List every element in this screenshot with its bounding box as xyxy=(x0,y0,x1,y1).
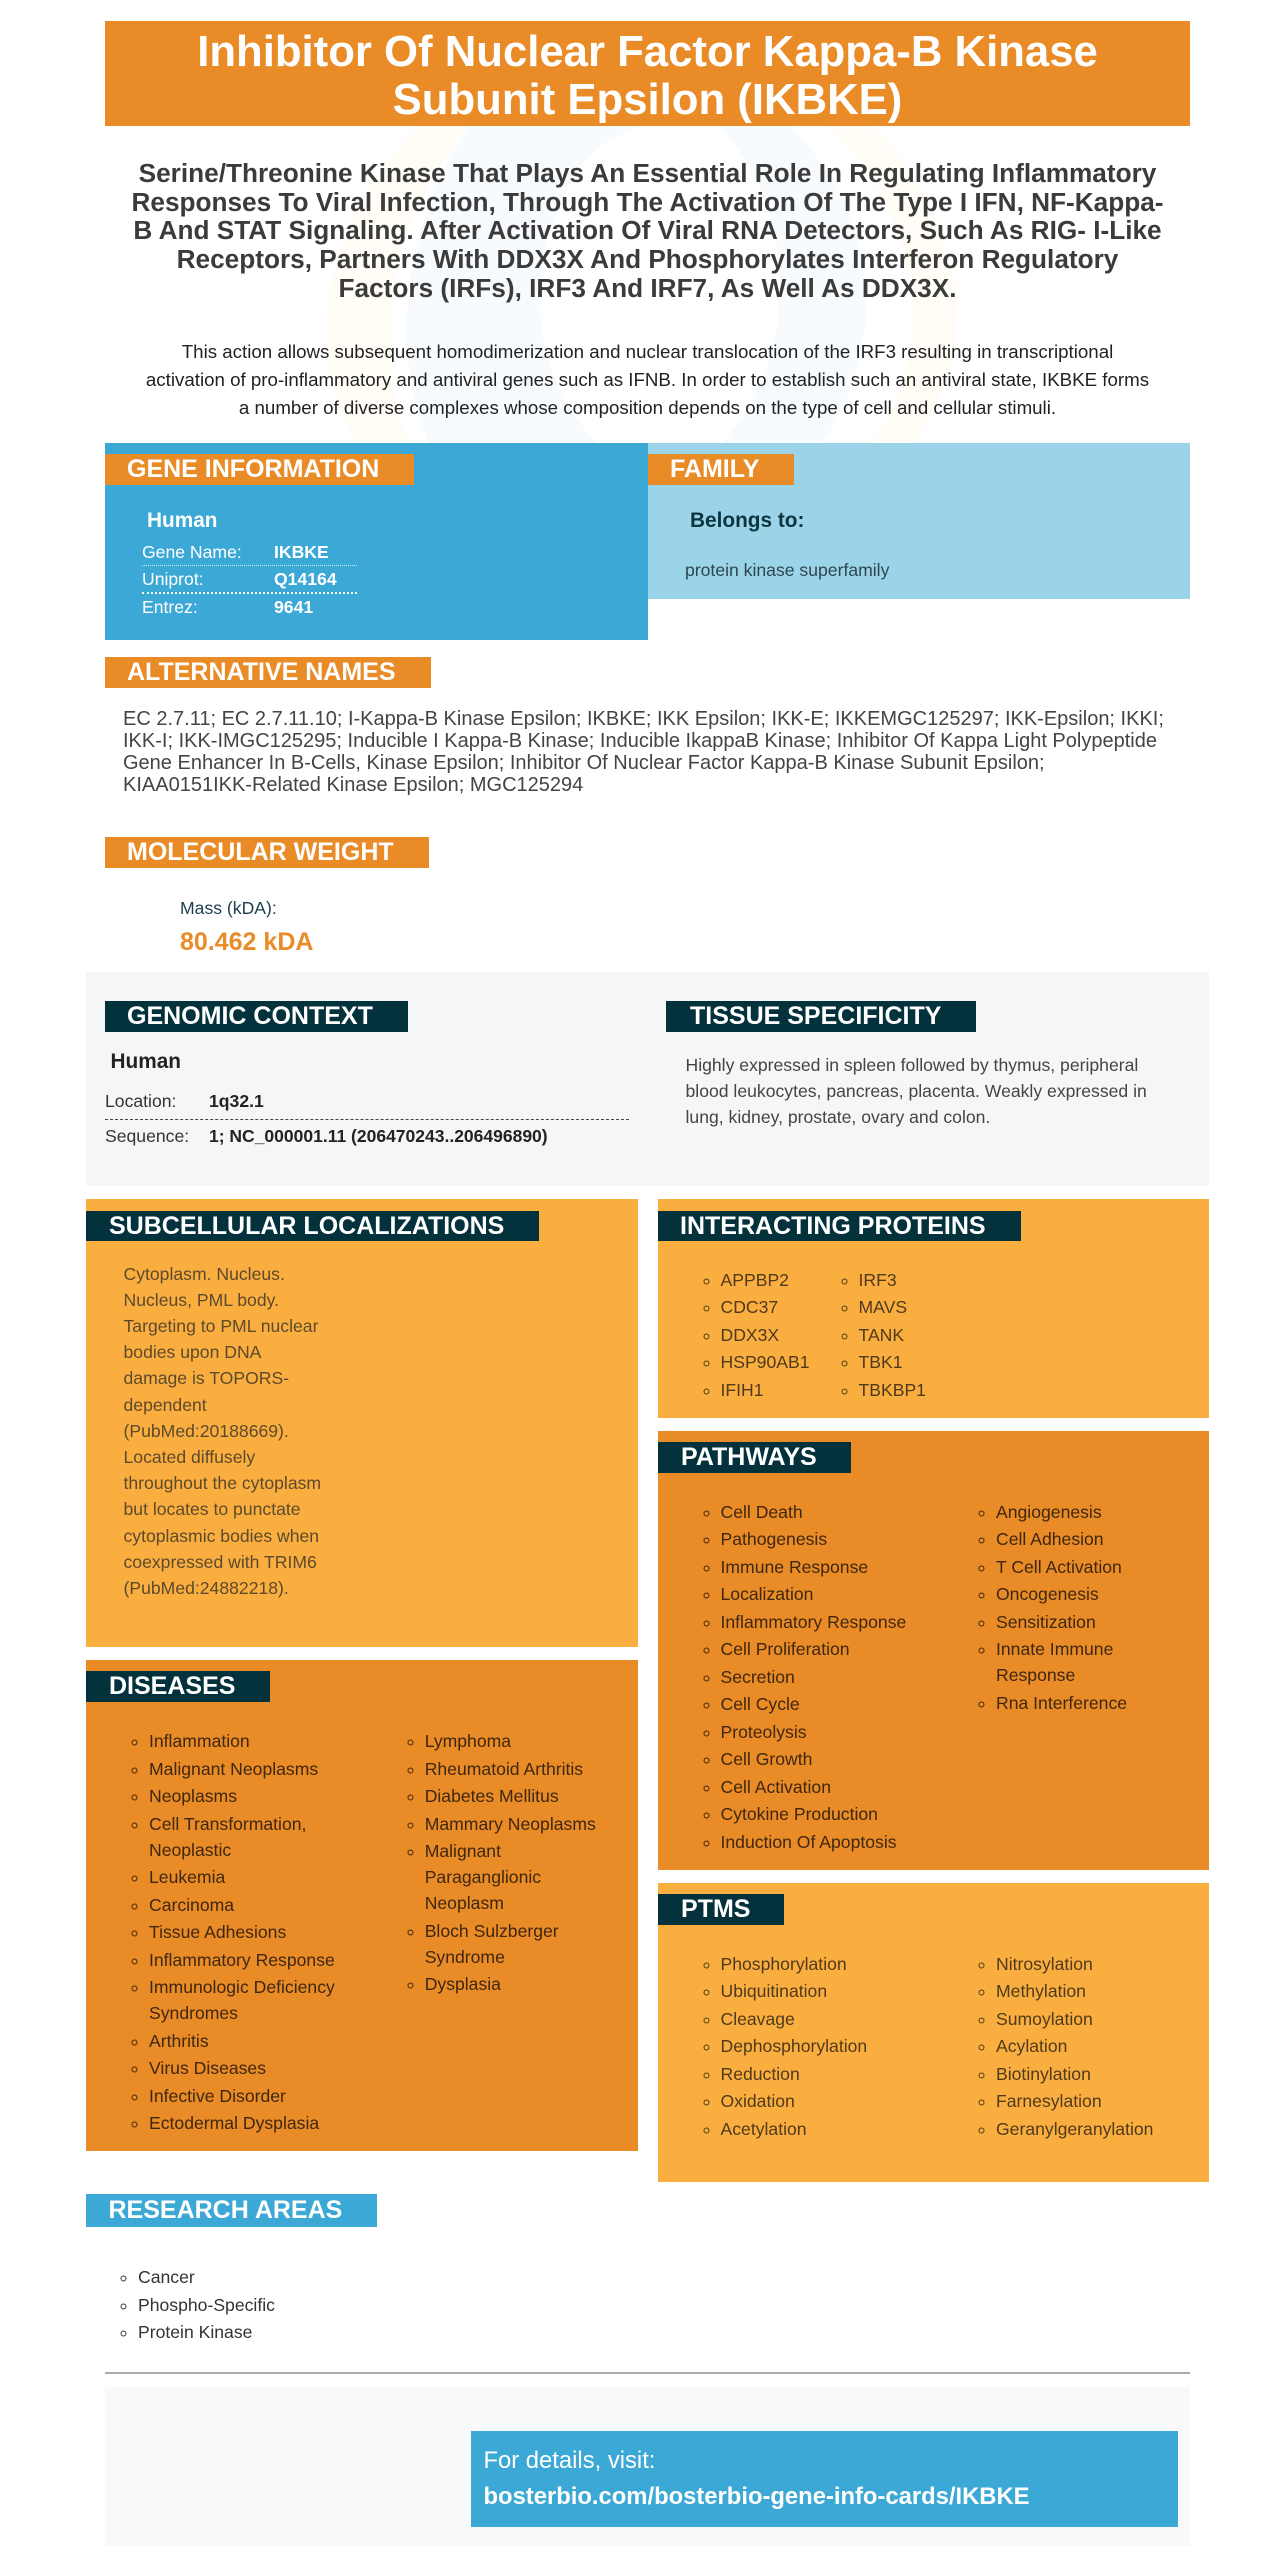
pathway list column 1: Inflammatory Response xyxy=(720,1612,906,1632)
research areas list: Phospho-Specific xyxy=(138,2294,275,2314)
alternative names text xyxy=(123,708,1164,796)
research areas list xyxy=(120,2267,275,2342)
heading: ptms xyxy=(658,1894,784,1925)
pathway list column 1: Cell Death xyxy=(720,1502,803,1522)
panel: gene information xyxy=(105,443,648,640)
pathway list column 1: Secretion xyxy=(720,1666,795,1686)
ptm list column 1 xyxy=(704,1954,867,2138)
disease list column 2: Lymphoma xyxy=(425,1731,511,1751)
disease list column 2: Malignant xyxy=(425,1841,501,1861)
pathway list column 2: Innate Immune xyxy=(996,1639,1113,1659)
disease list column 1: Infective Disorder xyxy=(149,2086,286,2106)
intro paragraph xyxy=(146,341,1149,418)
ptm list column 1: Ubiquitination xyxy=(720,1981,827,2001)
pathway list column 1: Proteolysis xyxy=(720,1722,807,1742)
subtitle xyxy=(131,158,1164,303)
alternative names text: Gene Enhancer In B-Cells, Kinase Epsilon; Inhibitor Of Nuclear Factor Kappa-B Kinase Subunit Epsilon; xyxy=(123,752,1045,774)
heading: pathways: PATHWAYS xyxy=(681,1443,817,1471)
pathway list column 1: Immune Response xyxy=(720,1556,868,1576)
ptm list column 2 xyxy=(978,1954,1153,2138)
disease list column 2: Rheumatoid Arthritis xyxy=(425,1758,583,1778)
protein list column 1: IFIH1 xyxy=(720,1380,764,1400)
heading: family xyxy=(648,454,794,485)
panel: pathways xyxy=(658,1431,1209,1870)
ptm list column 1: Cleavage xyxy=(720,2008,795,2028)
intro paragraph: activation of pro-inflammatory and antiviral genes such as IFNB. In order to establish such an antiviral state, IKBKE forms xyxy=(146,369,1149,390)
pathway list column 2: Response xyxy=(996,1665,1075,1685)
panel: family xyxy=(648,443,1190,599)
subtitle: Responses To Viral Infection, Through The Activation Of The Type I IFN, NF-Kappa- xyxy=(131,187,1164,217)
localization text: damage is TOPORS- xyxy=(124,1368,289,1388)
alternative names text: IKK-I; IKK-IMGC125295; Inducible I Kappa-B Kinase; Inducible IkappaB Kinase; Inhibitor Of Kappa Light Polypeptide xyxy=(123,730,1157,752)
heading: genomic context: GENOMIC CONTEXT xyxy=(127,1002,373,1030)
ptm list column 1: Phosphorylation xyxy=(720,1954,847,1974)
footer rule xyxy=(105,2372,1190,2374)
disease list column 2: Dysplasia xyxy=(425,1974,501,1994)
disease list column 2 xyxy=(408,1731,596,1994)
pathway list column 1: Pathogenesis xyxy=(720,1529,827,1549)
ptm list column 2: Biotinylation xyxy=(996,2064,1091,2084)
localization text: Located diffusely xyxy=(124,1447,255,1467)
section: alternative names xyxy=(105,657,1164,796)
tissue specificity text xyxy=(686,1055,1147,1127)
title: Inhibitor Of Nuclear Factor Kappa-B Kinase xyxy=(197,26,1098,76)
pathway list column 2 xyxy=(978,1502,1127,1712)
protein list column 1: APPBP2 xyxy=(720,1270,789,1290)
sequence row: Sequence: xyxy=(105,1126,189,1146)
disease list column 1: Virus Diseases xyxy=(149,2058,266,2078)
tissue specificity text: blood leukocytes, pancreas, placenta. Weakly expressed in xyxy=(686,1081,1147,1101)
protein list column 2: MAVS xyxy=(858,1297,907,1317)
pathway list column 2: T Cell Activation xyxy=(996,1556,1122,1576)
pathway list column 1: Cytokine Production xyxy=(720,1804,878,1824)
protein list column 2: IRF3 xyxy=(858,1270,897,1290)
disease list column 1: Neoplastic xyxy=(149,1840,231,1860)
protein list column 2: TANK xyxy=(858,1324,904,1344)
disease list column 2: Neoplasm xyxy=(425,1893,504,1913)
ptm list column 2: Acylation xyxy=(996,2036,1067,2056)
disease list column 2: Diabetes Mellitus xyxy=(425,1786,559,1806)
uniprot row: Q14164 xyxy=(274,569,337,589)
gene name row xyxy=(142,538,357,566)
pathway list column 1: Cell Proliferation xyxy=(720,1639,850,1659)
protein list column 2: TBKBP1 xyxy=(858,1380,926,1400)
ptm list column 2: Nitrosylation xyxy=(996,1954,1093,1974)
protein list column 1 xyxy=(704,1270,810,1400)
heading: family: FAMILY xyxy=(670,455,759,483)
alternative names text: EC 2.7.11; EC 2.7.11.10; I-Kappa-B Kinase Epsilon; IKBKE; IKK Epsilon; IKK-E; IKKEMGC125297; IKK-Epsilon; IKKI; xyxy=(123,708,1164,730)
protein list column 2 xyxy=(842,1270,926,1400)
panel: subcellular localizations xyxy=(86,1199,638,1647)
protein list column 1: DDX3X xyxy=(720,1324,779,1344)
pathway list column 1: Cell Cycle xyxy=(720,1694,800,1714)
species label: Human xyxy=(110,1050,181,1073)
disease list column 1 xyxy=(132,1731,335,2133)
tissue specificity text: Highly expressed in spleen followed by thymus, peripheral xyxy=(686,1055,1138,1075)
localization text: Cytoplasm. Nucleus. xyxy=(124,1264,285,1284)
location row xyxy=(105,1088,629,1120)
intro paragraph: This action allows subsequent homodimerization and nuclear translocation of the IRF3 resulting in transcriptional xyxy=(182,341,1113,362)
location row: 1q32.1 xyxy=(209,1090,264,1110)
disease list column 1: Tissue Adhesions xyxy=(149,1922,286,1942)
pathway list column 1: Cell Growth xyxy=(720,1749,812,1769)
pathway list column 2: Oncogenesis xyxy=(996,1584,1099,1604)
localization text: (PubMed:24882218). xyxy=(124,1578,289,1598)
disease list column 2: Paraganglionic xyxy=(425,1867,541,1887)
title: Subunit Epsilon (IKBKE) xyxy=(393,74,902,124)
subtitle: B And STAT Signaling. After Activation Of Viral RNA Detectors, Such As RIG- I-Like xyxy=(133,215,1162,245)
disease list column 2: Mammary Neoplasms xyxy=(425,1814,596,1834)
heading: ptms: PTMS xyxy=(681,1895,750,1923)
gene name row: Gene Name: xyxy=(142,542,242,562)
localization text: cytoplasmic bodies when xyxy=(124,1526,319,1546)
localization text: dependent xyxy=(124,1395,207,1415)
heading: subcellular localizations: SUBCELLULAR LOCALIZATIONS xyxy=(109,1212,504,1240)
panel: footer xyxy=(105,2387,1190,2546)
subtitle: Receptors, Partners With DDX3X And Phosphorylates Interferon Regulatory xyxy=(177,244,1118,274)
localization text: Targeting to PML nuclear xyxy=(124,1316,318,1336)
pathway list column 2: Sensitization xyxy=(996,1612,1096,1632)
pathway list column 1 xyxy=(704,1502,906,1852)
watermark logo xyxy=(326,126,956,443)
tissue specificity text: lung, kidney, prostate, ovary and colon. xyxy=(686,1107,990,1127)
subtitle: Factors (IRFs), IRF3 And IRF7, As Well As DDX3X. xyxy=(339,273,956,303)
ptm list column 2: Farnesylation xyxy=(996,2091,1102,2111)
heading: alternative names: ALTERNATIVE NAMES xyxy=(127,658,396,686)
protein list column 1: CDC37 xyxy=(720,1297,778,1317)
heading: diseases: DISEASES xyxy=(109,1672,235,1700)
disease list column 1: Arthritis xyxy=(149,2030,209,2050)
disease list column 1: Inflammation xyxy=(149,1731,250,1751)
localization text: (PubMed:20188669). xyxy=(124,1421,289,1441)
entrez row: 9641 xyxy=(274,597,313,617)
ptm list column 1: Oxidation xyxy=(720,2091,795,2111)
heading: interacting proteins: INTERACTING PROTEINS xyxy=(680,1212,986,1240)
ptm list column 1: Acetylation xyxy=(720,2118,807,2138)
section: molecular weight xyxy=(105,837,429,956)
call to action label: For details, visit: xyxy=(484,2447,655,2474)
pathway list column 2: Cell Adhesion xyxy=(996,1529,1104,1549)
heading: diseases xyxy=(86,1671,270,1702)
panel: interacting proteins xyxy=(658,1199,1209,1418)
uniprot row: Uniprot: xyxy=(142,569,204,589)
localization text: Nucleus, PML body. xyxy=(124,1290,279,1310)
disease list column 2: Syndrome xyxy=(425,1946,505,1966)
ptm list column 2: Sumoylation xyxy=(996,2008,1093,2028)
uniprot row xyxy=(142,566,357,594)
call to action link: bosterbio.com/bosterbio-gene-info-cards/IKBKE xyxy=(484,2483,1030,2510)
gene name row: IKBKE xyxy=(274,542,329,562)
heading: pathways xyxy=(658,1442,851,1473)
research areas list: Cancer xyxy=(138,2267,195,2287)
call to action xyxy=(471,2431,1178,2527)
ptm list column 2: Methylation xyxy=(996,1981,1086,2001)
panel: diseases xyxy=(86,1660,638,2151)
species label: Human xyxy=(147,509,217,532)
disease list column 1: Malignant Neoplasms xyxy=(149,1758,318,1778)
belongs to label: Belongs to: xyxy=(690,509,804,532)
protein list column 1: HSP90AB1 xyxy=(720,1352,810,1372)
panel: ptms xyxy=(658,1883,1209,2182)
disease list column 1: Inflammatory Response xyxy=(149,1950,335,1970)
heading: gene information: GENE INFORMATION xyxy=(127,455,379,483)
entrez row xyxy=(142,597,313,617)
localization text: coexpressed with TRIM6 xyxy=(124,1552,317,1572)
disease list column 1: Cell Transformation, xyxy=(149,1814,306,1834)
disease list column 1: Leukemia xyxy=(149,1867,225,1887)
heading: research areas xyxy=(86,2194,377,2227)
heading: research areas: RESEARCH AREAS xyxy=(108,2196,342,2224)
panel: genomic context and tissue specificity xyxy=(86,972,1209,1186)
disease list column 1: Neoplasms xyxy=(149,1786,237,1806)
disease list column 1: Carcinoma xyxy=(149,1894,234,1914)
pathway list column 2: Angiogenesis xyxy=(996,1502,1102,1522)
pathway list column 1: Induction Of Apoptosis xyxy=(720,1832,897,1852)
title xyxy=(105,21,1190,126)
family value: protein kinase superfamily xyxy=(685,560,889,580)
alternative names text: KIAA0151IKK-Related Kinase Epsilon; MGC125294 xyxy=(123,774,583,796)
research areas list: Protein Kinase xyxy=(138,2322,252,2342)
mass value: 80.462 kDA xyxy=(180,928,313,956)
disease list column 2: Bloch Sulzberger xyxy=(425,1920,559,1940)
pathway list column 1: Cell Activation xyxy=(720,1776,831,1796)
disease list column 1: Immunologic Deficiency xyxy=(149,1977,335,1997)
ptm list column 1: Dephosphorylation xyxy=(720,2036,867,2056)
localization text xyxy=(124,1264,321,1598)
localization text: but locates to punctate xyxy=(124,1499,301,1519)
heading: tissue specificity: TISSUE SPECIFICITY xyxy=(690,1002,941,1030)
intro paragraph: a number of diverse complexes whose composition depends on the type of cell and cellular stimuli. xyxy=(239,397,1056,418)
localization text: throughout the cytoplasm xyxy=(124,1473,321,1493)
sequence row: 1; NC_000001.11 (206470243..206496890) xyxy=(209,1126,548,1146)
entrez row: Entrez: xyxy=(142,597,198,617)
mass label: Mass (kDA): xyxy=(180,898,277,918)
ptm list column 1: Reduction xyxy=(720,2064,800,2084)
disease list column 1: Syndromes xyxy=(149,2003,238,2023)
location row: Location: xyxy=(105,1090,176,1110)
pathway list column 2: Rna Interference xyxy=(996,1692,1127,1712)
subtitle: Serine/Threonine Kinase That Plays An Essential Role In Regulating Inflammatory xyxy=(139,158,1156,188)
pathway list column 1: Localization xyxy=(720,1584,813,1604)
ptm list column 2: Geranylgeranylation xyxy=(996,2118,1153,2138)
heading: molecular weight: MOLECULAR WEIGHT xyxy=(127,838,394,866)
protein list column 2: TBK1 xyxy=(858,1352,903,1372)
disease list column 1: Ectodermal Dysplasia xyxy=(149,2113,319,2133)
localization text: bodies upon DNA xyxy=(124,1342,261,1362)
